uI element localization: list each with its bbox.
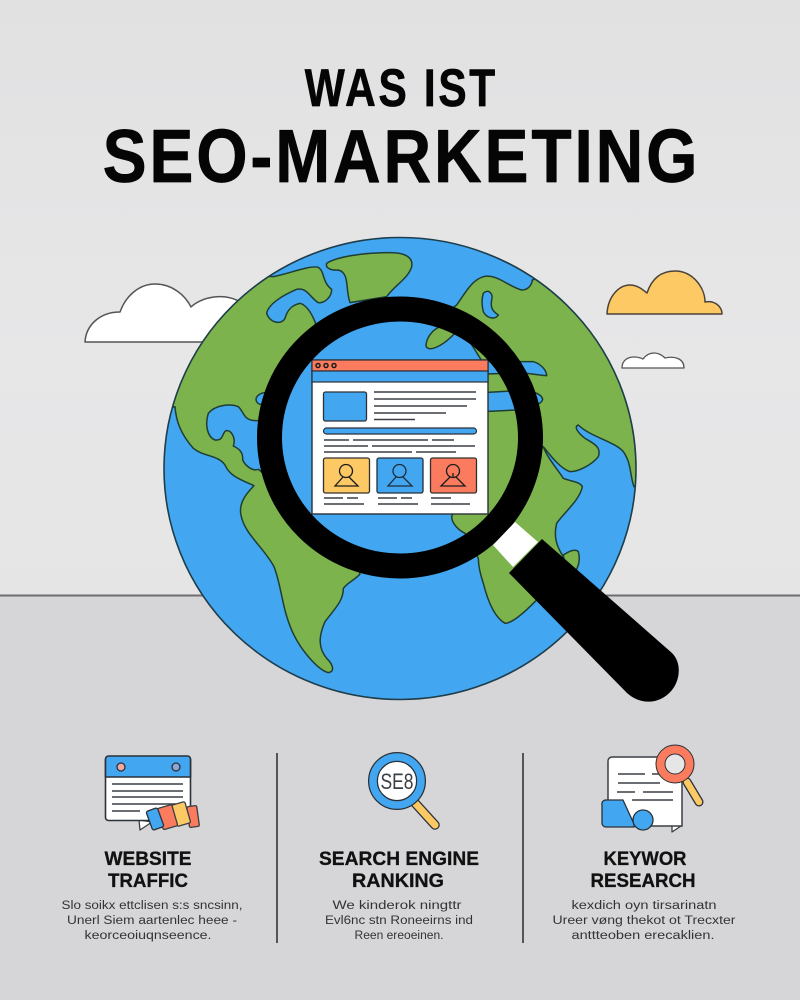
result card yellow (324, 458, 370, 493)
handle (509, 539, 679, 702)
background floor (0, 596, 800, 1000)
text: website traffic: Slo soikx ettclisen s:s sncsinn, (62, 900, 242, 912)
white collar (493, 522, 538, 567)
heading: website traffic: TRAFFIC (108, 871, 188, 892)
result card blue (377, 458, 423, 493)
text: search engine ranking: Reen ereoeinen. (354, 930, 444, 942)
text: search engine ranking (325, 900, 473, 942)
text: keyword research (552, 900, 736, 942)
icon: search engine ranking (373, 757, 435, 825)
paragraph lines (324, 440, 475, 452)
text: search engine ranking: We kinderok ningttr (332, 900, 462, 912)
magnifying glass (270, 309, 679, 702)
hero image block (324, 392, 366, 421)
heading: website traffic (104, 849, 192, 892)
text: website traffic: keorceoiuqnseence. (84, 930, 212, 942)
browser window mockup (312, 360, 488, 514)
icon: keyword research (602, 750, 699, 832)
background wall (0, 0, 800, 596)
cloud: white left (85, 284, 245, 342)
icon: search engine ranking: SE8 (380, 769, 414, 794)
column dividers (277, 753, 523, 943)
world map land masses (150, 253, 650, 673)
result card red (430, 458, 476, 493)
heading: search engine ranking: RANKING (352, 871, 444, 892)
caption lines (324, 498, 470, 504)
lens ring (270, 309, 530, 566)
hero text lines (374, 392, 476, 420)
heading: keyword research: KEYWOR (604, 849, 687, 870)
heading: keyword research (590, 849, 696, 892)
text: website traffic (62, 900, 242, 942)
heading: search engine ranking: SEARCH ENGINE (319, 849, 479, 870)
icon: website traffic (106, 756, 199, 830)
browser title bar (312, 360, 488, 371)
search bar (324, 428, 476, 434)
heading: website traffic: WEBSITE (104, 849, 192, 870)
text: keyword research: kexdich oyn tirsarinatn (572, 900, 716, 912)
title (103, 60, 697, 198)
text: keyword research: Ureer vøng thekot ot Trecxter (552, 915, 736, 927)
globe (150, 238, 650, 700)
heading: keyword research: RESEARCH (590, 871, 696, 892)
text: website traffic: Unerl Siem aartenlec heee - (67, 915, 237, 927)
title: WAS IST (305, 60, 495, 118)
cloud: yellow right (607, 271, 722, 314)
cloud: small white (622, 353, 684, 368)
text: keyword research: anttteoben erecaklien. (572, 930, 714, 942)
text: search engine ranking: Evl6nc stn Roneeirns ind (325, 915, 473, 927)
browser nav bar (312, 371, 488, 382)
title: SEO-MARKETING (103, 114, 697, 198)
heading: search engine ranking (319, 849, 479, 892)
window buttons (316, 364, 336, 368)
